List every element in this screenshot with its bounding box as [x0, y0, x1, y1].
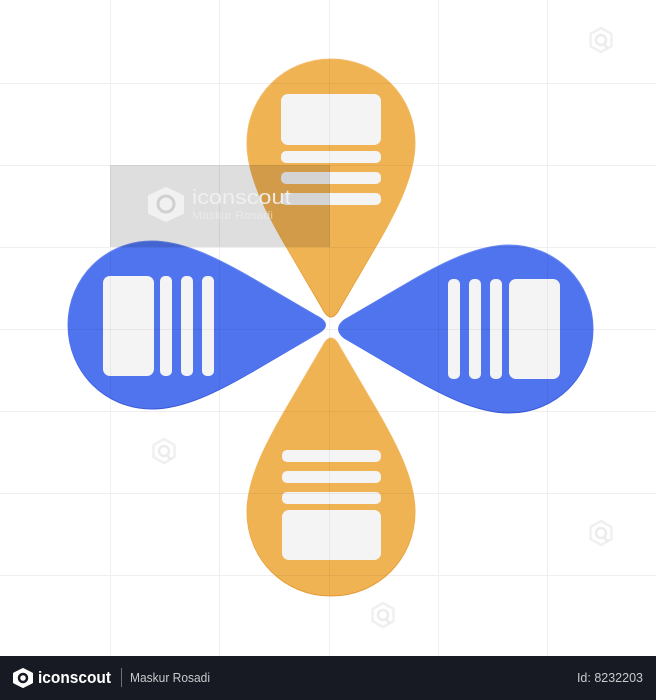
icon: small watermark bottom	[372, 603, 394, 627]
panel: left blue pin	[68, 241, 326, 409]
icon: small watermark middle left	[154, 439, 174, 463]
panel: top orange pin	[247, 59, 415, 317]
footer bar	[0, 656, 656, 700]
watermark: iconscout overlay: Maskur Rosadi	[192, 210, 273, 222]
icon: small watermark top right	[590, 28, 612, 52]
panel: bottom orange pin	[247, 338, 415, 596]
icon: iconscout logo	[14, 669, 32, 687]
footer id: Id: 8232203	[577, 671, 643, 685]
watermark: iconscout overlay	[110, 165, 330, 247]
footer brand name: iconscout	[38, 669, 111, 687]
footer author name: Maskur Rosadi	[130, 671, 210, 685]
panel: right blue pin	[338, 245, 593, 413]
icon: small watermark lower right	[590, 521, 612, 545]
watermark: iconscout overlay: iconscout	[192, 187, 292, 209]
